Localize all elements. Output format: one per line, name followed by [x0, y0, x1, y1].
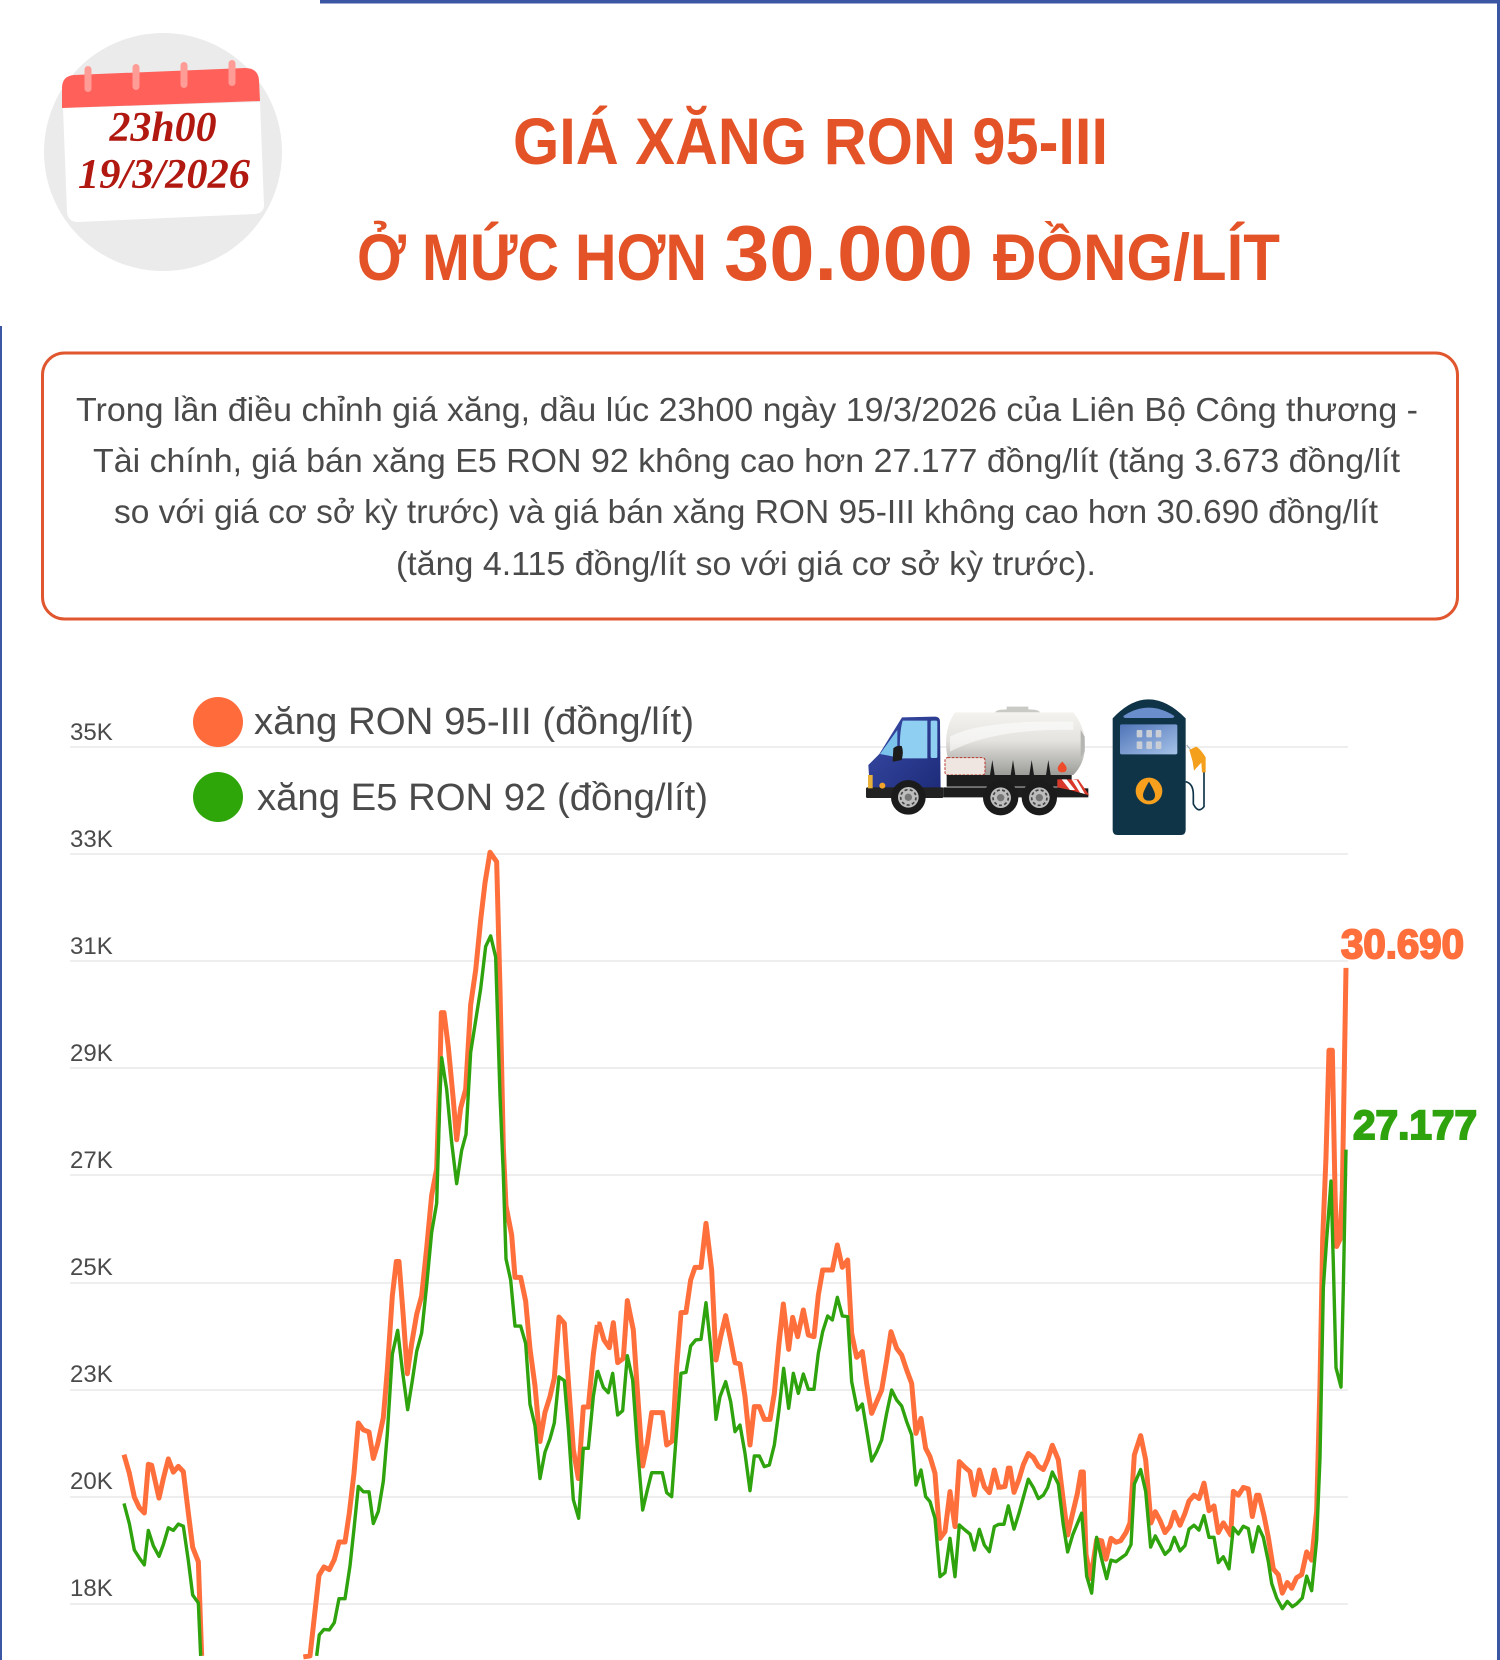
- title: [357, 104, 1280, 297]
- y axis labels: 18K: [70, 1575, 113, 1602]
- y axis labels: 25K: [70, 1254, 113, 1281]
- y axis labels: 35K: [70, 719, 113, 746]
- y axis labels: 33K: [70, 826, 113, 853]
- y axis labels: 20K: [70, 1468, 113, 1495]
- legend: xăng E5 RON 92 (đồng/lít): [257, 777, 708, 819]
- legend: [193, 697, 708, 822]
- calendar badge: 23h00: [109, 105, 216, 151]
- series: xăng E5 RON 92: [124, 936, 1346, 1656]
- icon: tanker truck: [866, 707, 1089, 815]
- series: xăng RON 95-III: [124, 852, 1346, 1657]
- summary text box: so với giá cơ sở kỳ trước) và giá bán xăng RON 95-III không cao hơn 30.690 đồng/lít: [114, 493, 1378, 530]
- y axis labels: [70, 719, 113, 1602]
- y axis labels: 29K: [70, 1040, 113, 1067]
- summary text box: (tăng 4.115 đồng/lít so với giá cơ sở kỳ trước).: [396, 545, 1096, 582]
- title: Ở MỨC HƠN: [357, 220, 707, 294]
- y axis labels: 23K: [70, 1361, 113, 1388]
- value label 30.690: 30.690: [1341, 921, 1464, 967]
- summary text box: Trong lần điều chỉnh giá xăng, dầu lúc 23h00 ngày 19/3/2026 của Liên Bộ Công thương -: [76, 391, 1418, 428]
- line chart: [70, 719, 1477, 1657]
- y axis labels: 31K: [70, 933, 113, 960]
- icon: fuel pump: [1113, 699, 1206, 835]
- calendar badge: [44, 33, 282, 271]
- summary text box: [42, 353, 1458, 619]
- value label 27.177: 27.177: [1353, 1102, 1477, 1148]
- title: 30.000: [724, 209, 973, 297]
- title: GIÁ XĂNG RON 95-III: [513, 104, 1108, 178]
- legend: xăng RON 95-III (đồng/lít): [254, 701, 694, 743]
- calendar badge: 19/3/2026: [78, 152, 250, 198]
- y axis labels: 27K: [70, 1147, 113, 1174]
- title: ĐỒNG/LÍT: [993, 220, 1280, 294]
- summary text box: Tài chính, giá bán xăng E5 RON 92 không cao hơn 27.177 đồng/lít (tăng 3.673 đồng/lít: [93, 442, 1400, 479]
